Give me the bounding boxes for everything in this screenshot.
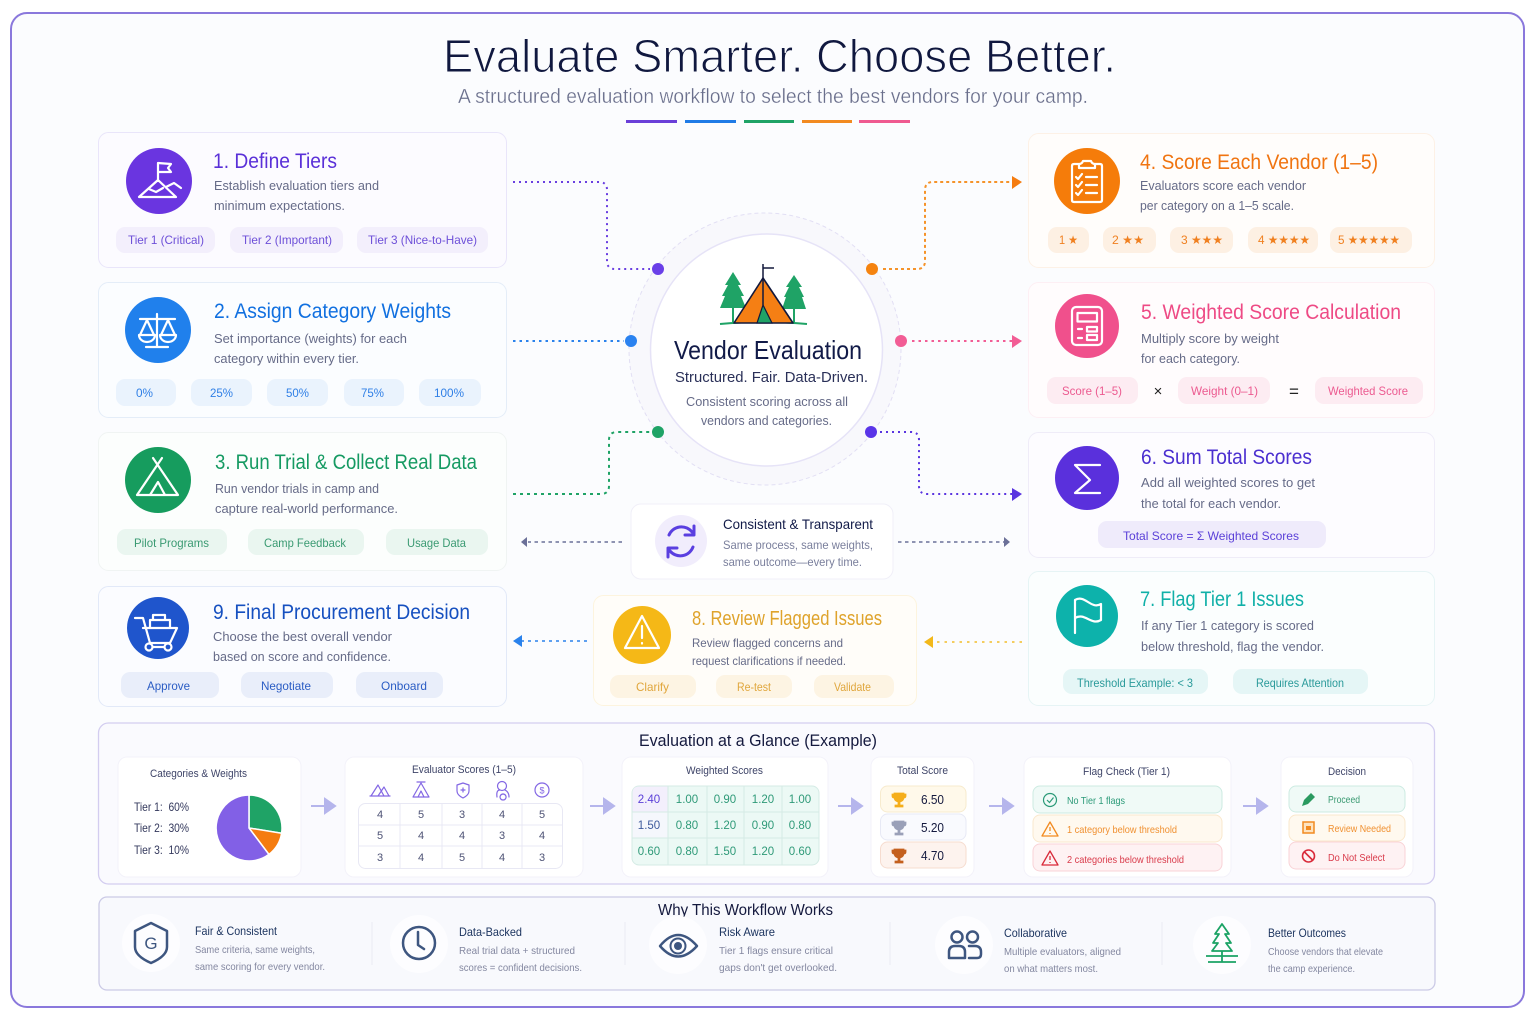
connectors — [513, 182, 1022, 642]
description — [214, 178, 379, 213]
weighted table: 0.80 — [676, 846, 698, 858]
score chips: 2 ★★ — [1112, 233, 1144, 247]
heading: 2. Assign Category Weights — [214, 300, 451, 323]
description — [213, 629, 393, 664]
heading: 8. Review Flagged Issues — [692, 608, 882, 630]
description: Choose the best overall vendor — [213, 629, 393, 644]
status: one category: 1 category below threshold — [1067, 824, 1177, 836]
description: Set importance (weights) for each — [214, 331, 407, 346]
panel: step 4 score — [1028, 134, 1434, 268]
threshold chips — [1063, 669, 1368, 694]
benefit: risk aware: Tier 1 flags ensure critical — [719, 945, 833, 957]
weighted table: 0.90 — [752, 820, 774, 832]
hub tagline: Structured. Fair. Data-Driven. — [675, 369, 868, 386]
icon: tent — [125, 447, 191, 513]
benefit: collaborative — [935, 916, 1121, 975]
decision: review needed: Review Needed — [1328, 823, 1391, 835]
weighted table — [632, 786, 819, 865]
arrow — [590, 799, 614, 813]
scores table: 5 — [459, 852, 465, 864]
benefit: risk aware: gaps don't get overlooked. — [719, 962, 837, 974]
status: no flags: No Tier 1 flags — [1067, 795, 1125, 807]
tier percentages: Tier 2: 30% — [134, 821, 189, 835]
scores table: 4 — [499, 852, 505, 864]
scores table: 4 — [377, 809, 383, 821]
icon: warning — [613, 606, 671, 664]
description — [214, 331, 407, 366]
panel: step 3 trial — [98, 432, 506, 570]
hub description — [686, 394, 848, 428]
sum formula chip — [1098, 521, 1326, 548]
arrow — [311, 799, 335, 813]
connector: hub to step 5 — [912, 340, 1014, 342]
benefit: fair and consistent: G — [144, 934, 158, 953]
connector: step 2 to hub — [513, 340, 624, 342]
tier percentages — [134, 800, 189, 857]
panel: step 5 calculation — [1028, 282, 1434, 418]
scores table: 3 — [539, 852, 545, 864]
benefit: collaborative: on what matters most. — [1004, 963, 1098, 975]
card: decision: Decision — [1328, 766, 1366, 778]
description — [1140, 178, 1307, 213]
weighted table: 1.00 — [789, 794, 811, 806]
panel: consistent and transparent — [631, 504, 893, 579]
weight chips: 0% — [136, 386, 153, 400]
card: categories and weights — [118, 757, 301, 877]
scores table: 5 — [418, 809, 424, 821]
formula chips: Score (1–5) — [1062, 384, 1122, 398]
connector: step 3 to hub — [513, 432, 650, 494]
scores table: 4 — [459, 830, 465, 842]
gold score: 6.50 — [921, 792, 944, 807]
weighted table: 1.20 — [714, 820, 736, 832]
tier chips: Tier 3 (Nice-to-Have) — [368, 233, 477, 247]
icon: refresh — [655, 515, 707, 567]
description — [215, 481, 398, 516]
bronze score: 4.70 — [921, 848, 944, 863]
panel: why this workflow works — [99, 897, 1435, 990]
scores table: 3 — [377, 852, 383, 864]
weighted table: 1.20 — [752, 846, 774, 858]
description: for each category. — [1141, 351, 1240, 366]
connector: step 8 to step 9 — [522, 640, 587, 642]
weighted table: 1.50 — [638, 820, 660, 832]
review chips: Validate — [834, 680, 871, 694]
weighted table: 1.20 — [752, 794, 774, 806]
panel: evaluation at a glance — [98, 723, 1434, 884]
description — [1141, 618, 1324, 654]
icon: clipboard — [1054, 148, 1120, 214]
connector: to right of transparency card — [898, 541, 1004, 543]
description: request clarifications if needed. — [692, 654, 846, 668]
benefit: collaborative: Collaborative — [1004, 926, 1067, 940]
connector: hub to step 4 — [883, 182, 1014, 269]
card: evaluator scores — [345, 757, 583, 877]
card: flag check: Flag Check (Tier 1) — [1083, 766, 1170, 778]
title: Evaluate Smarter. Choose Better. — [443, 30, 1116, 82]
benefit: fair and consistent: same scoring for every vendor. — [195, 961, 325, 973]
weighted table: 0.90 — [714, 794, 736, 806]
weight chips: 100% — [434, 386, 464, 400]
card description: Same process, same weights, — [723, 538, 873, 552]
scores table: 3 — [499, 830, 505, 842]
score chips: 4 ★★★★ — [1258, 233, 1310, 247]
card: weighted scores — [622, 757, 828, 877]
icon: calculator — [1055, 294, 1119, 358]
heading: 4. Score Each Vendor (1–5) — [1140, 151, 1378, 174]
description: Add all weighted scores to get — [1141, 475, 1315, 490]
arrow — [989, 799, 1013, 813]
status: two categories — [1033, 844, 1222, 871]
benefit: data backed: Real trial data + structured — [459, 945, 575, 957]
tier chips: Tier 2 (Important) — [242, 233, 332, 247]
scores table: 4 — [539, 830, 545, 842]
scores table — [358, 804, 562, 868]
icon: mountain flag — [126, 148, 192, 214]
description: the total for each vendor. — [1141, 496, 1281, 511]
decision: proceed: Proceed — [1328, 794, 1360, 806]
panel: step 8 review — [594, 596, 916, 706]
scores table: 4 — [499, 809, 505, 821]
description: per category on a 1–5 scale. — [1140, 198, 1294, 213]
threshold chips: Threshold Example: < 3 — [1077, 676, 1193, 690]
weighted table: 0.60 — [789, 846, 811, 858]
scores table: 5 — [377, 830, 383, 842]
weight chips: 25% — [210, 386, 233, 400]
weight chips: 50% — [286, 386, 309, 400]
description: based on score and confidence. — [213, 649, 391, 664]
glance heading: Evaluation at a Glance (Example) — [639, 731, 877, 750]
arrow — [838, 799, 862, 813]
icon: tent and trees — [720, 264, 807, 324]
decision chips: Onboard — [381, 679, 427, 693]
description: Evaluators score each vendor — [1140, 178, 1307, 193]
icon: flag — [1056, 585, 1118, 647]
pie chart — [216, 795, 282, 861]
data chips: Usage Data — [407, 536, 466, 550]
icon: cart — [127, 597, 189, 659]
card: categories and weights: Categories & Weights — [150, 768, 247, 780]
heading: 7. Flag Tier 1 Issues — [1140, 588, 1304, 611]
heading: 9. Final Procurement Decision — [213, 601, 470, 624]
description: minimum expectations. — [214, 198, 345, 213]
card heading: Consistent & Transparent — [723, 516, 873, 532]
benefit: data backed — [390, 915, 582, 974]
benefit: fair and consistent — [122, 914, 325, 973]
description: capture real-world performance. — [215, 501, 398, 516]
score chips: 3 ★★★ — [1181, 233, 1223, 247]
tier chips: Tier 1 (Critical) — [128, 233, 204, 247]
panel: step 6 sum — [1028, 432, 1434, 558]
benefit: better outcomes: Choose vendors that elevate — [1268, 946, 1383, 958]
score chips: 1 ★ — [1059, 233, 1078, 247]
tier percentages: Tier 1: 60% — [134, 800, 189, 814]
hub description: vendors and categories. — [701, 413, 832, 428]
hub heading: Vendor Evaluation — [674, 335, 862, 365]
threshold chips: Requires Attention — [1256, 676, 1344, 690]
description — [1141, 475, 1315, 511]
scores table: 3 — [459, 809, 465, 821]
weighted table: 1.50 — [714, 846, 736, 858]
data chips: Camp Feedback — [264, 536, 347, 550]
connector: step 1 to hub — [513, 182, 650, 269]
tier chips — [116, 227, 488, 253]
arrow — [1243, 799, 1267, 813]
connector: hub to step 6 — [880, 432, 1014, 494]
review chips: Clarify — [636, 680, 669, 694]
panel: step 1 define tiers — [98, 132, 506, 268]
hub dots — [625, 263, 907, 438]
sum formula chip: Total Score = Σ Weighted Scores — [1123, 529, 1299, 543]
description: below threshold, flag the vendor. — [1141, 639, 1324, 654]
card: weighted scores: Weighted Scores — [686, 765, 763, 777]
description: category within every tier. — [214, 351, 359, 366]
formula chips: × — [1154, 383, 1162, 400]
weighted table: 0.80 — [676, 820, 698, 832]
status: two categories: 2 categories below threshold — [1067, 854, 1184, 866]
review chips: Re-test — [737, 680, 772, 694]
weighted table: 2.40 — [638, 794, 660, 806]
scores table: 4 — [418, 852, 424, 864]
weighted table: 0.60 — [638, 846, 660, 858]
status: one category — [1033, 815, 1222, 842]
review chips — [610, 675, 894, 698]
status: no flags — [1033, 786, 1222, 813]
scores table: 5 — [539, 809, 545, 821]
formula chips: = — [1289, 382, 1299, 401]
benefit: collaborative: Multiple evaluators, aligned — [1004, 946, 1121, 958]
data chips — [117, 529, 488, 555]
card: total score: Total Score — [897, 765, 948, 777]
decision chips: Negotiate — [261, 679, 311, 693]
decision: do not select: Do Not Select — [1328, 852, 1385, 864]
description: Review flagged concerns and — [692, 636, 843, 650]
colour bars — [626, 120, 910, 123]
weighted table: 1.00 — [676, 794, 698, 806]
subtitle: A structured evaluation workflow to select the best vendors for your camp. — [458, 86, 1088, 108]
decision chips — [121, 672, 443, 698]
header — [443, 30, 1116, 123]
benefit: risk aware — [649, 916, 837, 974]
score chips — [1048, 227, 1412, 253]
heading: 1. Define Tiers — [213, 150, 337, 173]
heading: 5. Weighted Score Calculation — [1141, 301, 1401, 324]
benefit: fair and consistent: Fair & Consistent — [195, 924, 278, 938]
score chips: 5 ★★★★★ — [1338, 233, 1400, 247]
icon: sigma — [1055, 446, 1119, 510]
formula chips: Weight (0–1) — [1191, 384, 1258, 398]
description — [692, 636, 846, 668]
panel: step 9 decision — [98, 586, 506, 706]
weight chips — [116, 379, 481, 406]
card description — [723, 538, 873, 569]
description: Multiply score by weight — [1141, 331, 1279, 346]
tier percentages: Tier 3: 10% — [134, 843, 189, 857]
description: If any Tier 1 category is scored — [1141, 618, 1314, 633]
card description: same outcome—every time. — [723, 555, 862, 569]
benefit: fair and consistent: Same criteria, same weights, — [195, 944, 315, 956]
benefit: data backed: scores = confident decisions. — [459, 962, 582, 974]
criteria icons: $ — [539, 786, 545, 796]
decision chips: Approve — [147, 679, 190, 693]
heading: 3. Run Trial & Collect Real Data — [215, 451, 477, 474]
benefit: better outcomes: the camp experience. — [1268, 963, 1355, 975]
benefit: risk aware: Risk Aware — [719, 925, 775, 939]
benefit: data backed: Data-Backed — [459, 925, 522, 939]
hub description: Consistent scoring across all — [686, 394, 848, 409]
silver score: 5.20 — [921, 820, 944, 835]
panel: step 7 flag — [1028, 572, 1434, 706]
icon: scales — [125, 297, 191, 363]
why heading: Why This Workflow Works — [658, 902, 833, 919]
formula chips: Weighted Score — [1328, 384, 1408, 398]
panel: step 2 weights — [98, 282, 506, 418]
connector: step 7 to step 8 — [933, 641, 1022, 643]
arrowheads — [513, 176, 1022, 648]
description: Run vendor trials in camp and — [215, 481, 379, 496]
description — [1141, 331, 1279, 366]
scores table: 4 — [418, 830, 424, 842]
hub circle — [629, 213, 901, 485]
benefit: better outcomes — [1193, 916, 1383, 975]
benefit: better outcomes: Better Outcomes — [1268, 926, 1346, 940]
connector: to left of transparency card — [528, 541, 622, 543]
weighted table: 0.80 — [789, 820, 811, 832]
data chips: Pilot Programs — [134, 536, 209, 550]
card: total score — [871, 757, 974, 877]
weight chips: 75% — [361, 386, 384, 400]
description: Establish evaluation tiers and — [214, 178, 379, 193]
card: evaluator scores: Evaluator Scores (1–5) — [412, 764, 516, 776]
heading: 6. Sum Total Scores — [1141, 446, 1312, 469]
card: flag check — [1024, 757, 1231, 877]
criteria icons — [370, 782, 549, 800]
formula chips — [1047, 377, 1423, 404]
card: decision — [1281, 757, 1413, 877]
